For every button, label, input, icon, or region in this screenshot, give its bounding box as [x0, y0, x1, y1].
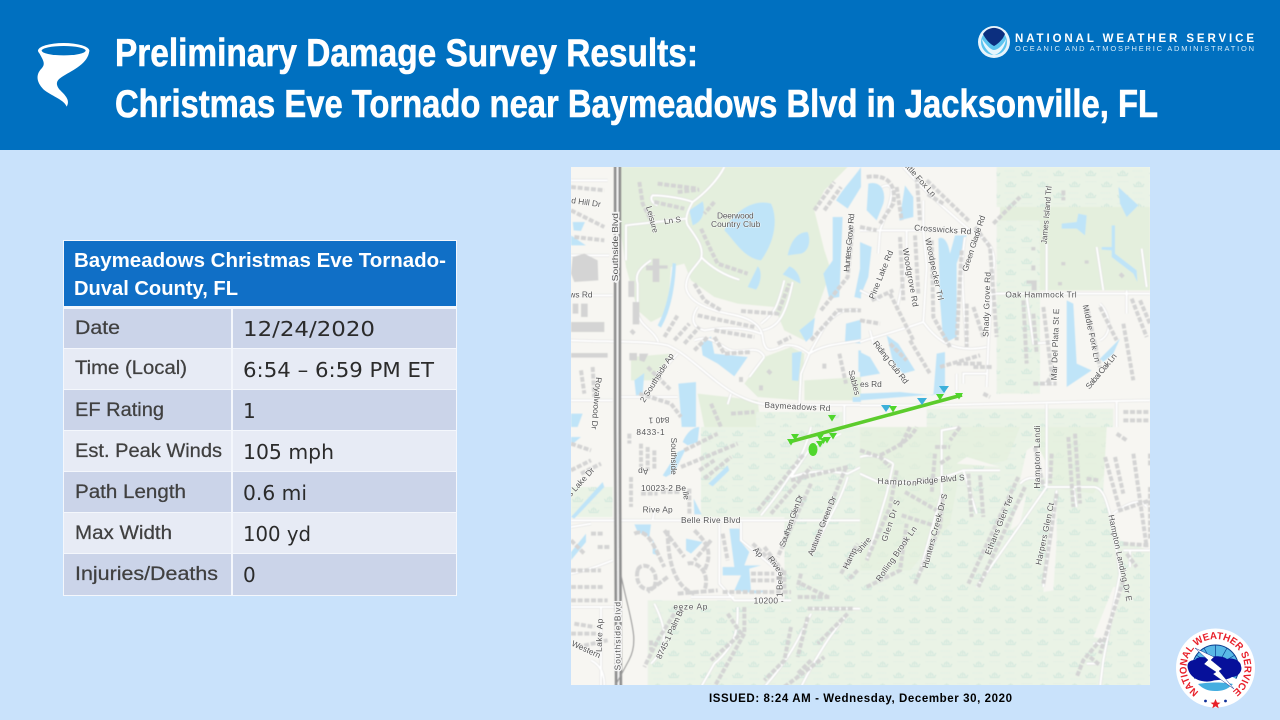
map street labels: Rive [766, 554, 784, 574]
map street labels: Mar Del Plata St E [1049, 308, 1061, 380]
map quadrant: southwest [571, 427, 861, 687]
row: EF rating [64, 390, 456, 430]
map street labels: Middle Fork Ln [1081, 304, 1103, 363]
icon: tornado [38, 43, 89, 107]
row: path length [64, 472, 456, 512]
map street labels: Southern Glen Dr [777, 493, 805, 548]
row: path length: Path Length [75, 481, 186, 503]
title: Preliminary Damage Survey Results: [115, 32, 698, 75]
map street labels: Autumn Green Dr [805, 494, 838, 557]
map street labels: Country Club [711, 219, 761, 229]
map street labels: Ethans Glen Ter [983, 493, 1016, 556]
map street labels: Ap [638, 467, 648, 477]
row: max width: Max Width [75, 522, 172, 544]
map street labels: Southside Blvd [612, 602, 622, 670]
damage points: cluster blob [808, 443, 818, 456]
map street labels: s Lake Dr [565, 465, 596, 498]
row: injuries and deaths: Injuries/Deaths [75, 563, 218, 585]
map street labels: lle [681, 491, 692, 501]
agency name [1015, 33, 1254, 53]
title [115, 32, 1158, 126]
row: peak winds: 105 mph [243, 440, 334, 464]
row: time [64, 349, 456, 389]
map street labels: es Rd [860, 379, 882, 389]
map street labels: Harpers Glen Ct [1033, 501, 1056, 566]
map street labels: Riding Club Rd [871, 339, 911, 386]
map street labels: Ridge Blvd S [916, 472, 965, 486]
map street labels: Woodpecker Trl [923, 237, 946, 301]
map street labels: Crosswicks Rd [914, 222, 972, 236]
row: date [64, 309, 456, 348]
map street labels: Ap [751, 545, 766, 560]
map street labels [565, 162, 1135, 670]
map base layers [566, 160, 1155, 690]
row: EF rating: 1 [243, 399, 256, 423]
map street labels: Lake Ap [594, 618, 605, 652]
row: injuries and deaths [64, 554, 456, 595]
map street labels: Rolling Brook Ln [873, 524, 919, 583]
map street labels: Oak Hammock Trl [1005, 290, 1077, 300]
map street labels: ittle Fox Ln [904, 162, 938, 199]
map street labels: 10200 - [754, 596, 784, 606]
tornado track line [789, 395, 962, 442]
map street labels: Sabal Oak Ln [1083, 351, 1119, 391]
icon: NWS seal [1176, 628, 1255, 708]
row: path length: 0.6 mi [243, 481, 307, 505]
map quadrant: northeast [860, 167, 1150, 427]
row: max width: 100 yd [243, 522, 311, 546]
map street labels: eeze Ap [673, 602, 708, 612]
damage points: blue markers [881, 386, 949, 412]
map street labels: Hampton Landi [1032, 425, 1042, 489]
icon: NOAA logo [978, 26, 1010, 58]
seal stars [1210, 699, 1220, 708]
map street labels: Woodgrove Rd [901, 247, 921, 308]
map street labels: Royalwood Dr [589, 377, 604, 430]
map street labels: Hampton Landing Dr E [1106, 514, 1135, 603]
map street labels: Deerwood [717, 211, 754, 221]
issued timestamp: ISSUED: 8:24 AM - Wednesday, December 30, 2020 [709, 693, 1012, 705]
map street labels: 8433-1 [636, 427, 665, 437]
map street labels: shire [854, 534, 873, 555]
seal cloud [1188, 656, 1241, 682]
map street labels: 2 Southside Ap [638, 351, 676, 404]
table heading [64, 241, 456, 306]
map street labels: James Island Trl [1039, 185, 1054, 245]
row: injuries and deaths: 0 [243, 563, 256, 587]
row: date: Date [75, 317, 120, 339]
map street labels: Hunters Creek Dr S [920, 492, 950, 569]
map street labels: Western [570, 638, 603, 660]
table heading: Baymeadows Christmas Eve Tornado- [74, 250, 446, 272]
map street labels: Sables [846, 369, 863, 396]
panel: tornado summary table [63, 240, 457, 596]
header band [0, 0, 1280, 150]
map street labels: 1 Belle [774, 571, 784, 597]
table heading: Duval County, FL [74, 278, 238, 300]
map street labels: 10023-2 Be [641, 483, 686, 493]
map street labels: Southside [669, 438, 679, 475]
row: max width [64, 513, 456, 553]
map street labels: d Hill Dr [571, 195, 602, 209]
row: time: 6:54 – 6:59 PM ET [243, 358, 435, 382]
map street labels: Glen Dr S [879, 498, 902, 543]
map street labels: Southside Blvd [610, 213, 620, 281]
map street labels: Pine Lake Rd [867, 248, 895, 300]
row: date: 12/24/2020 [243, 317, 375, 341]
map street labels: Rive Ap [643, 504, 673, 514]
map quadrant: northwest [571, 167, 861, 427]
row: peak winds: Est. Peak Winds [75, 440, 222, 462]
agency name: OCEANIC AND ATMOSPHERIC ADMINISTRATION [1015, 44, 1254, 53]
seal ring text: NATIONAL WEATHER SERVICE [1180, 632, 1252, 697]
map street labels: 8745-1 Palm Br [654, 606, 686, 661]
Southside Blvd highway [613, 160, 634, 690]
map street labels: 840 1 [648, 415, 670, 426]
map street labels: Hampton [877, 476, 917, 488]
map street labels: ws Rd [568, 289, 593, 299]
map quadrant: southeast [860, 427, 1150, 687]
map street labels: Belle Rive Blvd [681, 515, 741, 525]
map: tornado track over streets [565, 160, 1155, 690]
map street labels: Shady Grove Rd [980, 271, 993, 337]
row: peak winds [64, 431, 456, 471]
map street labels: Green Glade Rd [960, 214, 987, 273]
map street labels: Baymeadows Rd [764, 400, 831, 413]
seal lightning bolt [1195, 648, 1234, 689]
agency name: NATIONAL WEATHER SERVICE [1015, 33, 1254, 45]
map street labels: Hamp [840, 546, 859, 571]
map street labels: Leisure [644, 205, 661, 234]
damage points: green markers [787, 393, 963, 456]
row: EF rating: EF Rating [75, 399, 164, 421]
map street labels: Hunters Grove Rd [841, 213, 856, 272]
row: time: Time (Local) [75, 357, 187, 379]
map street labels: Ln S [663, 214, 682, 226]
